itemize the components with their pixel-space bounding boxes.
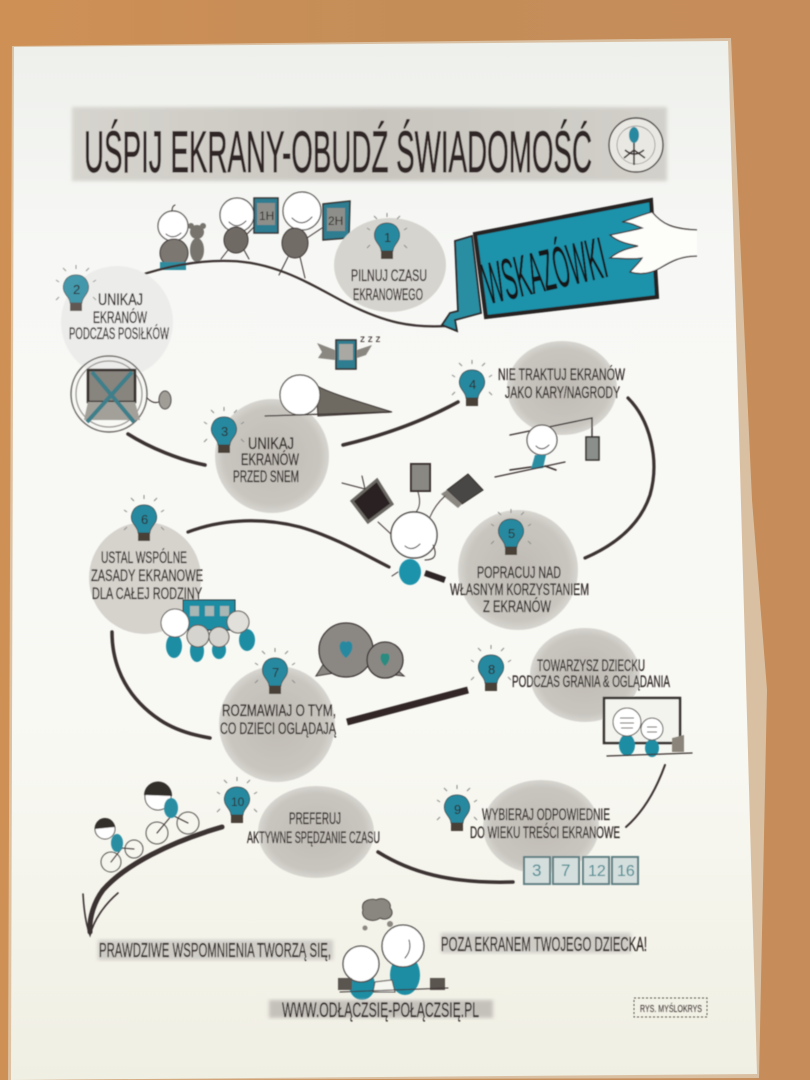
flying phone bbox=[336, 340, 356, 369]
tip 2 text: UNIKAJ bbox=[98, 290, 143, 309]
bulb 8: 8 bbox=[488, 662, 495, 677]
arrow to closing message bbox=[83, 827, 222, 935]
tip 5 bbox=[450, 509, 589, 630]
tip 1 bubble: EKRANOWEGO bbox=[353, 285, 423, 304]
child left bbox=[349, 970, 375, 1000]
closing message right: POZA EKRANEM TWOJEGO DZIECKA! bbox=[441, 934, 647, 956]
closing message right bbox=[441, 933, 647, 956]
bulb 5: 5 bbox=[508, 526, 515, 541]
tip 7 text: ROZMAWIAJ O TYM, bbox=[222, 701, 336, 720]
age rating boxes: 16 bbox=[617, 863, 635, 880]
age rating boxes: 12 bbox=[588, 863, 606, 880]
title band bbox=[72, 107, 667, 185]
tip 9 bbox=[437, 780, 620, 874]
child with teddy bbox=[158, 205, 206, 270]
tip 10 text: PREFERUJ bbox=[289, 809, 341, 828]
tip 3: PRZED SNEM bbox=[233, 467, 299, 486]
watching TV together bbox=[604, 698, 692, 757]
tip 5: Z EKRANÓW bbox=[483, 597, 551, 616]
tip 7: CO DZIECI OGLĄDAJĄ bbox=[220, 719, 336, 738]
tip 2: PODCZAS POSIŁKÓW bbox=[69, 324, 169, 343]
older child with tablet bbox=[279, 192, 350, 278]
tip 4 text: NIE TRAKTUJ EKRANÓW bbox=[498, 365, 625, 384]
two children with thought cloud bbox=[338, 899, 448, 1000]
characters on hill bbox=[158, 192, 350, 278]
connector 8-9 bbox=[626, 765, 665, 827]
tip 3 bbox=[204, 399, 329, 513]
cyclist two bbox=[144, 781, 199, 844]
tip 7 bbox=[219, 648, 336, 782]
connector 3-4 bbox=[343, 402, 458, 445]
tip 5 text: POPRACUJ NAD bbox=[477, 563, 561, 582]
banner with hand bbox=[442, 200, 697, 331]
bulb 4: 4 bbox=[469, 377, 476, 392]
cyclist one bbox=[95, 818, 143, 872]
central child with screens bbox=[342, 464, 483, 585]
book and blocks bbox=[373, 980, 395, 992]
child chasing phone bbox=[495, 418, 599, 477]
tip 6: ZASADY EKRANOWE bbox=[91, 566, 203, 585]
bulb 6: 6 bbox=[141, 512, 148, 527]
banner panel bbox=[475, 200, 657, 317]
tip 10: AKTYWNE SPĘDZANIE CZASU bbox=[247, 828, 380, 847]
tip 3: EKRANÓW bbox=[241, 450, 299, 469]
speech bubbles bbox=[316, 623, 404, 678]
tip 6 bbox=[89, 495, 203, 634]
age rating boxes: 7 bbox=[561, 861, 570, 880]
tip 3 text: UNIKAJ bbox=[248, 434, 294, 453]
tip 8: PODCZAS GRANIA & OGLĄDANIA bbox=[512, 672, 670, 691]
tip 9 text: WYBIERAJ ODPOWIEDNIE bbox=[482, 805, 610, 824]
age rating boxes bbox=[524, 857, 638, 884]
connector 9-10 bbox=[378, 852, 513, 882]
tip 8 text: TOWARZYSZ DZIECKU bbox=[537, 656, 645, 675]
bulb 9: 9 bbox=[454, 802, 461, 817]
closing message left bbox=[98, 940, 333, 962]
bulb 7: 7 bbox=[272, 665, 279, 680]
hill path bbox=[135, 261, 446, 326]
tip 5: WŁASNYM KORZYSTANIEM bbox=[450, 580, 589, 599]
child with tablet bbox=[220, 198, 278, 259]
phone bbox=[411, 464, 430, 491]
tip 4: JAKO KARY/NAGRODY bbox=[505, 383, 620, 402]
family at board bbox=[161, 600, 255, 662]
illustrator credit: RYS. MYŚLOKRYS bbox=[640, 1002, 702, 1015]
website band bbox=[269, 999, 493, 1022]
bulb 2: 2 bbox=[73, 282, 80, 297]
thought cloud bbox=[363, 899, 392, 920]
bulb 3: 3 bbox=[221, 424, 228, 439]
tip 2 bbox=[56, 265, 173, 378]
hand bbox=[610, 212, 697, 274]
crossed-out laptop bbox=[71, 356, 171, 432]
bulb 10 bbox=[217, 777, 257, 823]
illustrator credit bbox=[634, 998, 707, 1017]
bulb 4 bbox=[452, 360, 492, 406]
child right bbox=[390, 955, 420, 995]
tip 2: EKRANÓW bbox=[93, 308, 147, 327]
sleeping child bbox=[316, 385, 392, 416]
laptop bbox=[441, 474, 483, 508]
closing message left: PRAWDZIWE WSPOMNIENIA TWORZĄ SIĘ, bbox=[99, 940, 331, 962]
tip 6 text: USTAL WSPÓLNE bbox=[101, 548, 187, 567]
tip 4 bbox=[452, 341, 625, 435]
child with tablet: 1H bbox=[259, 209, 274, 223]
sleeping child with flying phone: z z z bbox=[360, 334, 381, 345]
TV bbox=[342, 476, 392, 522]
tip 8 bbox=[471, 628, 670, 722]
connector 7-8 bbox=[347, 690, 468, 722]
tip 10 bbox=[217, 777, 380, 878]
connector 5-6 bbox=[188, 521, 389, 567]
connector 6-7 bbox=[112, 632, 210, 738]
older child with tablet: 2H bbox=[328, 214, 343, 228]
tip 9: DO WIEKU TREŚCI EKRANOWE bbox=[470, 823, 620, 842]
banner fold and arrow bbox=[442, 236, 481, 331]
bulb 1: 1 bbox=[384, 230, 391, 245]
tip 1 bubble bbox=[334, 213, 446, 312]
connector 2-3 bbox=[128, 434, 205, 465]
cyclists bbox=[95, 781, 199, 872]
tip 1 text: PILNUJ CZASU bbox=[351, 266, 427, 285]
age rating boxes: 3 bbox=[532, 861, 541, 880]
bulb 9 bbox=[437, 785, 477, 831]
child bbox=[391, 512, 437, 558]
sleeping child with flying phone bbox=[265, 334, 392, 416]
website band: WWW.ODŁĄCZSIĘ-POŁĄCZSIĘ.PL bbox=[282, 999, 479, 1022]
connector 4-5 bbox=[585, 398, 654, 558]
artwork group bbox=[56, 107, 707, 1022]
logo badge bbox=[609, 118, 663, 172]
bulb 8 bbox=[471, 645, 511, 691]
bulb 10: 10 bbox=[231, 795, 245, 809]
tip 6: DLA CAŁEJ RODZINY bbox=[92, 584, 202, 603]
